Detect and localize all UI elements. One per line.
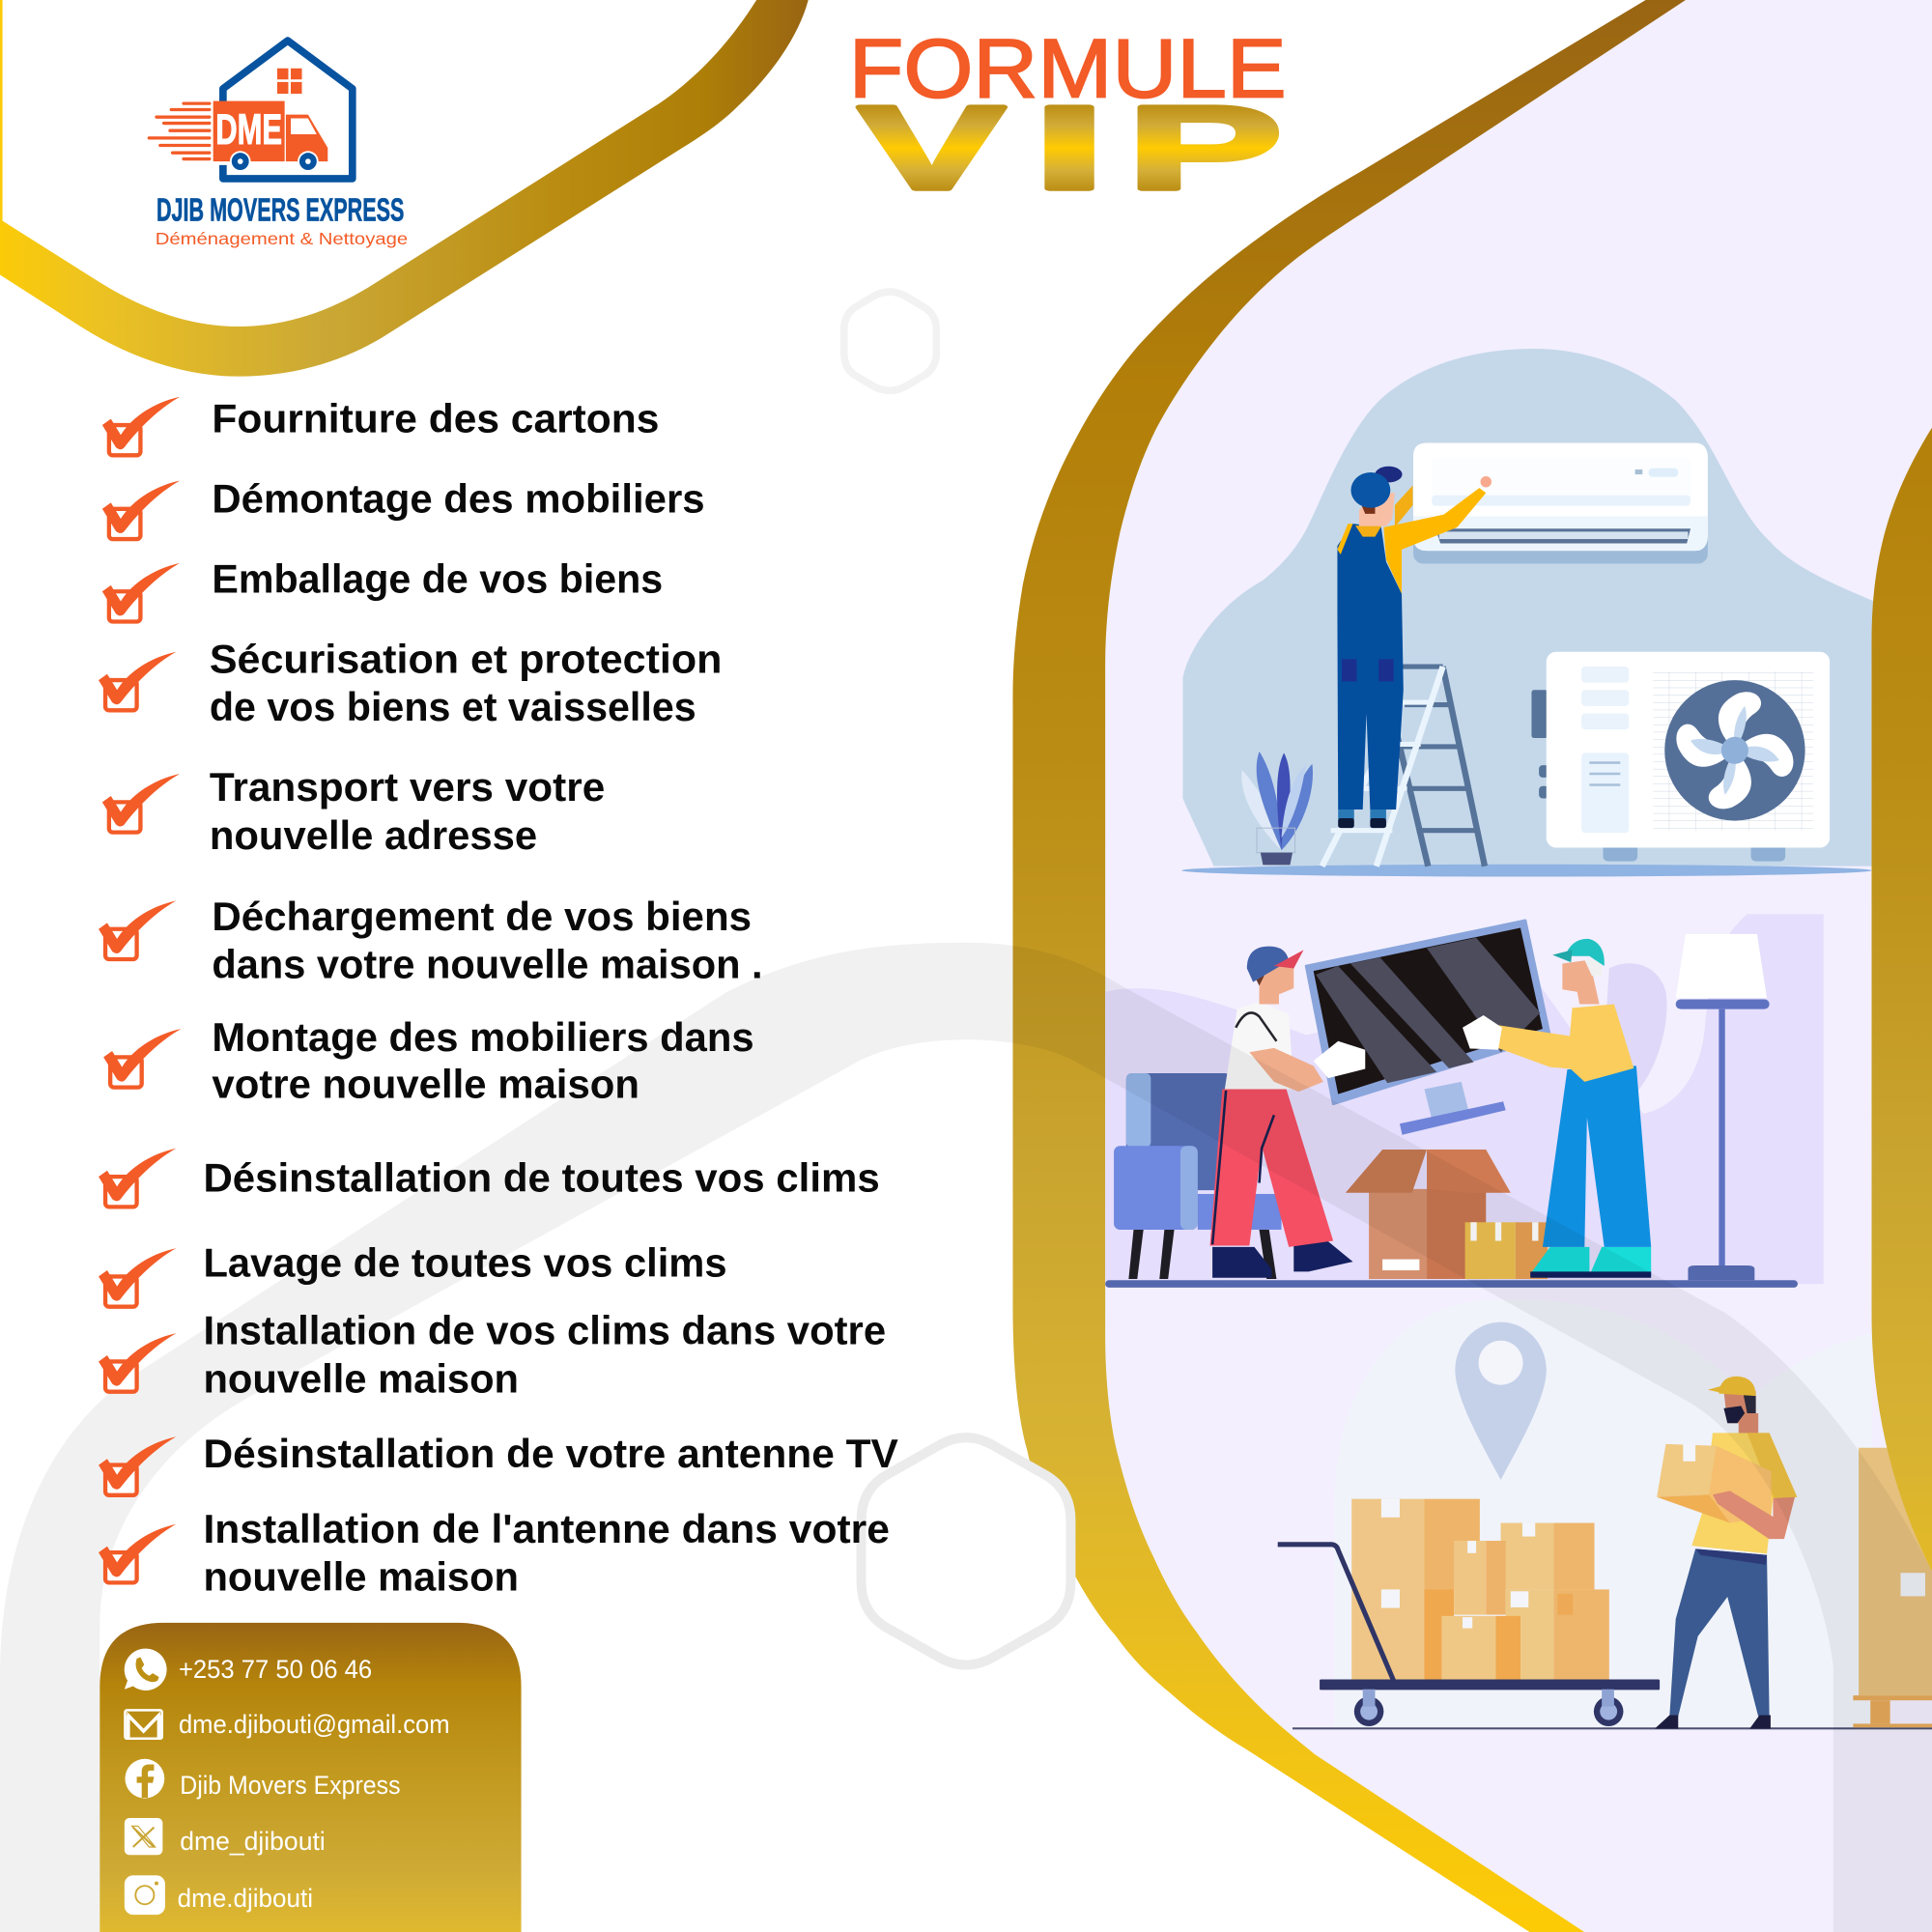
map pin (1455, 1322, 1547, 1480)
decorative translucent grey arch (0, 943, 1932, 1932)
contact: Facebook (125, 1759, 401, 1800)
contact: X (125, 1818, 326, 1856)
ground line (1293, 1727, 1932, 1729)
item: Déchargement (99, 894, 763, 987)
item: Sécurisation et protection: Sécurisation et protection (210, 636, 722, 681)
decorative hexagon large (862, 1437, 1070, 1665)
potted plant (1241, 752, 1313, 865)
item: Installation des clims: Installation de vos clims dans votre (203, 1308, 886, 1353)
item: Montage (103, 1014, 754, 1106)
trolley (1278, 1545, 1660, 1726)
item: Désinstallation des clims: Désinstallation de toutes vos clims (203, 1154, 880, 1200)
item: Transport (102, 764, 605, 858)
title line: VIP: V (859, 81, 1005, 213)
item: Désinstallation des clims (99, 1149, 880, 1207)
illustration: delivery man with trolley (1278, 1299, 1932, 1729)
item: Fourniture des cartons (102, 396, 659, 455)
item: Installation des clims (99, 1308, 886, 1401)
box stack at right edge (1853, 1448, 1932, 1727)
item: Emballage de vos biens: Emballage de vos biens (212, 556, 663, 602)
illustration: air conditioner technician (1181, 349, 1874, 877)
item: Démontage des mobiliers (102, 476, 705, 539)
contact: email: dme.djibouti@gmail.com (179, 1710, 450, 1739)
item: Installation antenne (99, 1506, 890, 1600)
delivery truck: DME (215, 106, 282, 154)
contact: X: dme_djibouti (180, 1827, 326, 1856)
speed lines (149, 103, 210, 159)
title line: VIP: I (1033, 82, 1106, 213)
title line: FORMULE: FORMULE (849, 22, 1287, 116)
decorative gold curve: right edge (1872, 428, 1932, 1571)
item: Transport: nouvelle adresse (210, 812, 537, 858)
stacked boxes (1351, 1499, 1609, 1680)
delivery truck (213, 101, 327, 172)
mover with red trousers (1210, 947, 1365, 1278)
item: Transport: Transport vers votre (210, 764, 605, 810)
contact: phone (125, 1649, 372, 1690)
floor lamp (1676, 934, 1770, 1280)
panel: lavender illustration background (1060, 0, 1932, 1932)
contact: Facebook: Djib Movers Express (180, 1771, 401, 1800)
technician (1337, 467, 1492, 828)
title line: VIP (859, 81, 1282, 213)
item: Sécurisation et protection: de vos biens et vaisselles (210, 684, 696, 729)
item: Emballage de vos biens (102, 556, 663, 621)
item: Désinstallation antenne: Désinstallation de votre antenne TV (203, 1431, 898, 1476)
pale background blobs (1334, 1299, 1872, 1727)
contact: phone: +253 77 50 06 46 (179, 1655, 372, 1684)
small box (1465, 1222, 1548, 1279)
contact: Instagram (125, 1875, 313, 1915)
outdoor AC unit (1531, 652, 1830, 862)
services checklist (99, 396, 898, 1600)
item: Lavage des clims (99, 1239, 727, 1307)
item: Désinstallation antenne (99, 1431, 898, 1495)
item: Installation antenne: nouvelle maison (203, 1554, 519, 1600)
mover with blue overalls (1463, 939, 1651, 1278)
item: Montage: votre nouvelle maison (212, 1061, 639, 1106)
delivery man (1655, 1377, 1797, 1729)
item: Installation antenne: Installation de l'antenne dans votre (203, 1506, 890, 1551)
tagline: Déménagement & Nettoyage (156, 229, 408, 248)
decorative gold ribbon: right panel border (1012, 0, 1686, 1932)
decorative hexagon small (844, 292, 936, 390)
item: Montage: Montage des mobiliers dans (212, 1014, 754, 1060)
title line: VIP: P (1126, 81, 1282, 213)
item: Sécurisation et protection (99, 636, 722, 729)
floor line (1105, 1280, 1798, 1288)
panel: contact card (99, 1623, 522, 1932)
contact: Instagram: dme.djibouti (178, 1884, 313, 1913)
floor (1181, 865, 1872, 877)
item: Démontage des mobiliers: Démontage des mobiliers (212, 476, 705, 522)
logo: Djib Movers Express (149, 41, 408, 248)
decorative gold ribbon: top left (0, 0, 809, 377)
background blob (1182, 349, 1874, 867)
indoor AC unit (1413, 443, 1708, 564)
item: Lavage des clims: Lavage de toutes vos clims (203, 1239, 727, 1285)
item: Fourniture des cartons: Fourniture des cartons (212, 396, 659, 441)
item: Déchargement: Déchargement de vos biens (212, 894, 752, 939)
armchair (1114, 1073, 1282, 1279)
house window (277, 69, 301, 94)
company name: DJIB MOVERS EXPRESS (156, 192, 404, 228)
illustration: two movers carrying a TV (1105, 914, 1824, 1288)
ladder (1322, 667, 1485, 867)
item: Installation des clims: nouvelle maison (203, 1355, 519, 1401)
item: Déchargement: dans votre nouvelle maison . (212, 942, 763, 987)
title (849, 22, 1287, 213)
TV monitor (1306, 921, 1550, 1135)
lavender room background (1105, 914, 1824, 1284)
house outline (223, 41, 353, 179)
cardboard box (1346, 1150, 1511, 1279)
